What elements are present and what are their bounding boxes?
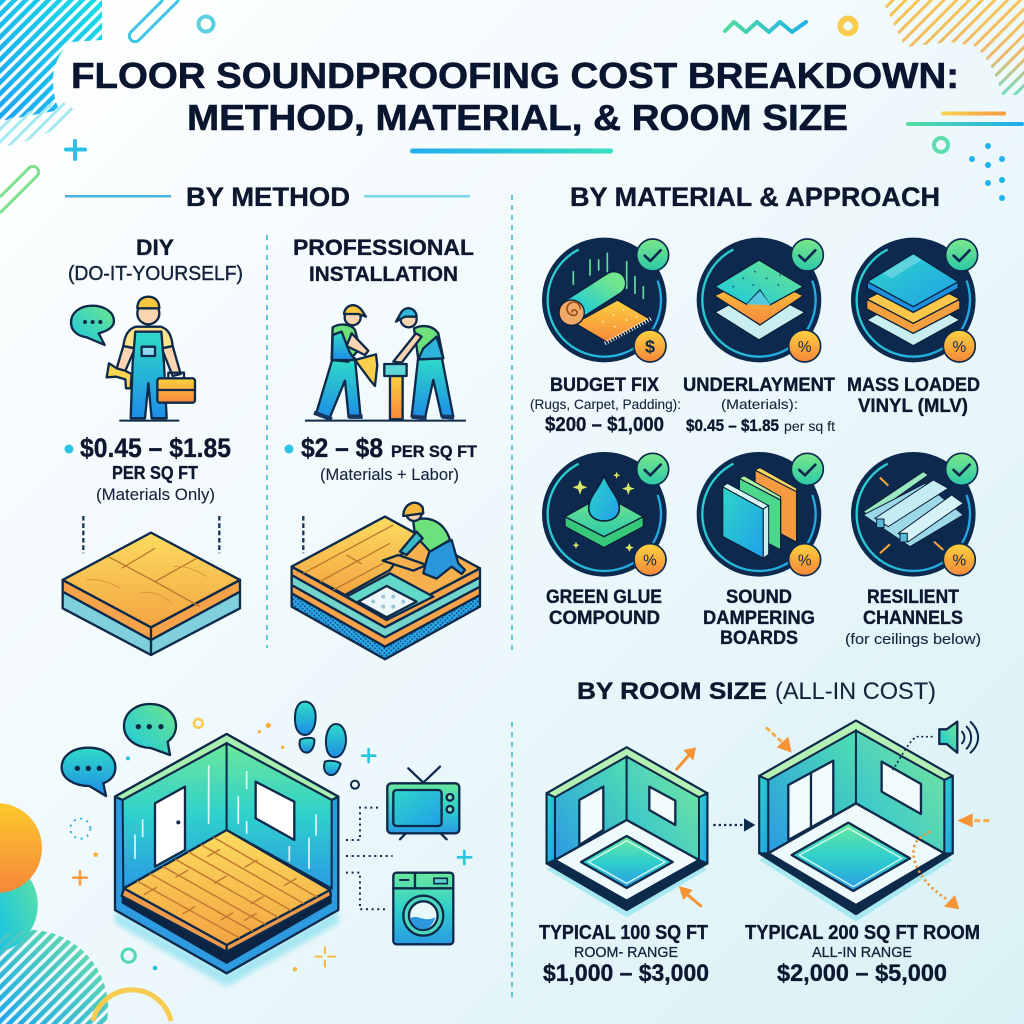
icon: washing machine — [393, 873, 453, 944]
label: underlayment: (Materials): — [721, 396, 798, 412]
heading: by room size — [577, 678, 936, 705]
heading: by room size: (ALL-IN COST) — [775, 678, 936, 705]
label: resilient channels: (for ceilings below) — [845, 631, 981, 648]
label: budget fix — [530, 375, 681, 436]
label: resilient channels: RESILIENT — [867, 587, 959, 608]
professional heading: INSTALLATION — [309, 263, 458, 286]
DIY heading — [68, 235, 243, 285]
icon: green glue compound: % — [643, 553, 657, 570]
decoration: top-right stripes and dots — [725, 0, 1024, 201]
label: sound dampering boards: DAMPERING — [703, 608, 815, 629]
icon: layered floor with installer — [292, 503, 480, 659]
icon: 200 sq ft room — [759, 721, 989, 922]
icon: DIY worker — [71, 297, 195, 421]
icon: resilient channels — [841, 442, 986, 587]
heading: by method: BY METHOD — [186, 182, 350, 212]
label: 100 sq ft: ROOM- RANGE — [574, 944, 678, 961]
label: underlayment: per sq ft — [784, 418, 835, 434]
icon: footprints — [295, 702, 346, 775]
icon: television — [387, 767, 459, 839]
icon: budget fix rug roll: $ — [645, 337, 655, 357]
DIY heading: (DO-IT-YOURSELF) — [68, 263, 243, 285]
DIY heading: DIY — [136, 235, 174, 260]
speech bubble green — [124, 704, 176, 755]
icon: green glue compound — [532, 442, 677, 587]
icon: 100 sq ft room — [547, 747, 707, 917]
icon: mass loaded vinyl — [841, 227, 986, 373]
professional price: $2 – $8 — [301, 433, 383, 463]
label: resilient channels: CHANNELS — [863, 608, 963, 629]
label: 200 sq ft: TYPICAL 200 SQ FT ROOM — [745, 922, 980, 944]
small sparkles — [70, 719, 471, 972]
panel: DIY — [63, 235, 243, 655]
room — [115, 734, 338, 973]
label: 100 sq ft: TYPICAL 100 SQ FT — [539, 922, 708, 944]
label: mass loaded vinyl: VINYL (MLV) — [858, 396, 968, 417]
title — [71, 55, 959, 138]
arrow: size upgrade — [713, 818, 755, 832]
icon: bare floor slab — [63, 516, 240, 655]
professional price — [284, 433, 478, 484]
heading: by material and approach: BY MATERIAL & APPROACH — [570, 182, 940, 212]
label: mass loaded vinyl: MASS LOADED — [847, 375, 980, 396]
label: 100 sq ft — [539, 922, 709, 987]
speech bubble blue — [62, 748, 115, 796]
label: 200 sq ft: ALL-IN RANGE — [812, 944, 912, 961]
label: green glue — [546, 587, 662, 629]
label: green glue: GREEN GLUE — [546, 587, 662, 608]
professional price: PER SQ FT — [391, 442, 478, 461]
icon: two workers — [305, 305, 466, 421]
professional heading — [293, 235, 474, 286]
label: sound dampering boards: SOUND — [726, 587, 792, 608]
label: budget fix: (Rugs, Carpet, Padding): — [530, 396, 681, 412]
label: budget fix: BUDGET FIX — [550, 375, 659, 396]
label: mass loaded vinyl — [847, 375, 980, 417]
professional price: (Materials + Labor) — [320, 465, 459, 484]
icon: sound dampening boards — [686, 442, 832, 587]
decoration: top-left stripes — [0, 0, 214, 213]
icon: resilient channels: % — [952, 553, 966, 570]
illustration: room with noise sources — [62, 702, 471, 987]
icon: speaker — [939, 722, 978, 753]
title: METHOD, MATERIAL, & ROOM SIZE — [187, 97, 848, 138]
panel: Professional installation — [284, 235, 480, 659]
heading: by room size: BY ROOM SIZE — [577, 678, 767, 705]
icon: mass loaded vinyl: % — [952, 339, 966, 356]
label: 200 sq ft: $2,000 – $5,000 — [777, 960, 947, 987]
panel: by room size — [539, 678, 989, 987]
label: 200 sq ft — [745, 922, 980, 987]
label: budget fix: $200 – $1,000 — [545, 414, 664, 436]
label: sound dampering boards: BOARDS — [720, 628, 798, 649]
icon: underlayment layers: % — [798, 339, 812, 356]
dotted connectors — [346, 808, 393, 909]
DIY price — [64, 433, 231, 504]
icon: budget fix rug roll — [532, 227, 677, 373]
panel: materials and approach — [530, 227, 986, 649]
DIY price: (Materials Only) — [96, 485, 215, 504]
decoration: bottom-left circles — [0, 803, 171, 1024]
icon: underlayment layers — [686, 227, 832, 373]
label: green glue: COMPOUND — [549, 608, 660, 629]
label: underlayment: UNDERLAYMENT — [683, 375, 835, 396]
label: underlayment: $0.45 – $1.85 — [686, 416, 779, 435]
label: resilient channels — [845, 587, 981, 648]
title: FLOOR SOUNDPROOFING COST BREAKDOWN: — [71, 55, 959, 96]
label: 100 sq ft: $1,000 – $3,000 — [543, 960, 709, 987]
DIY price: PER SQ FT — [112, 463, 198, 483]
label: underlayment — [683, 375, 835, 435]
DIY price: $0.45 – $1.85 — [80, 433, 231, 463]
icon: sound dampening boards: % — [798, 553, 812, 570]
label: sound dampering boards — [703, 587, 815, 649]
professional heading: PROFESSIONAL — [293, 235, 474, 260]
